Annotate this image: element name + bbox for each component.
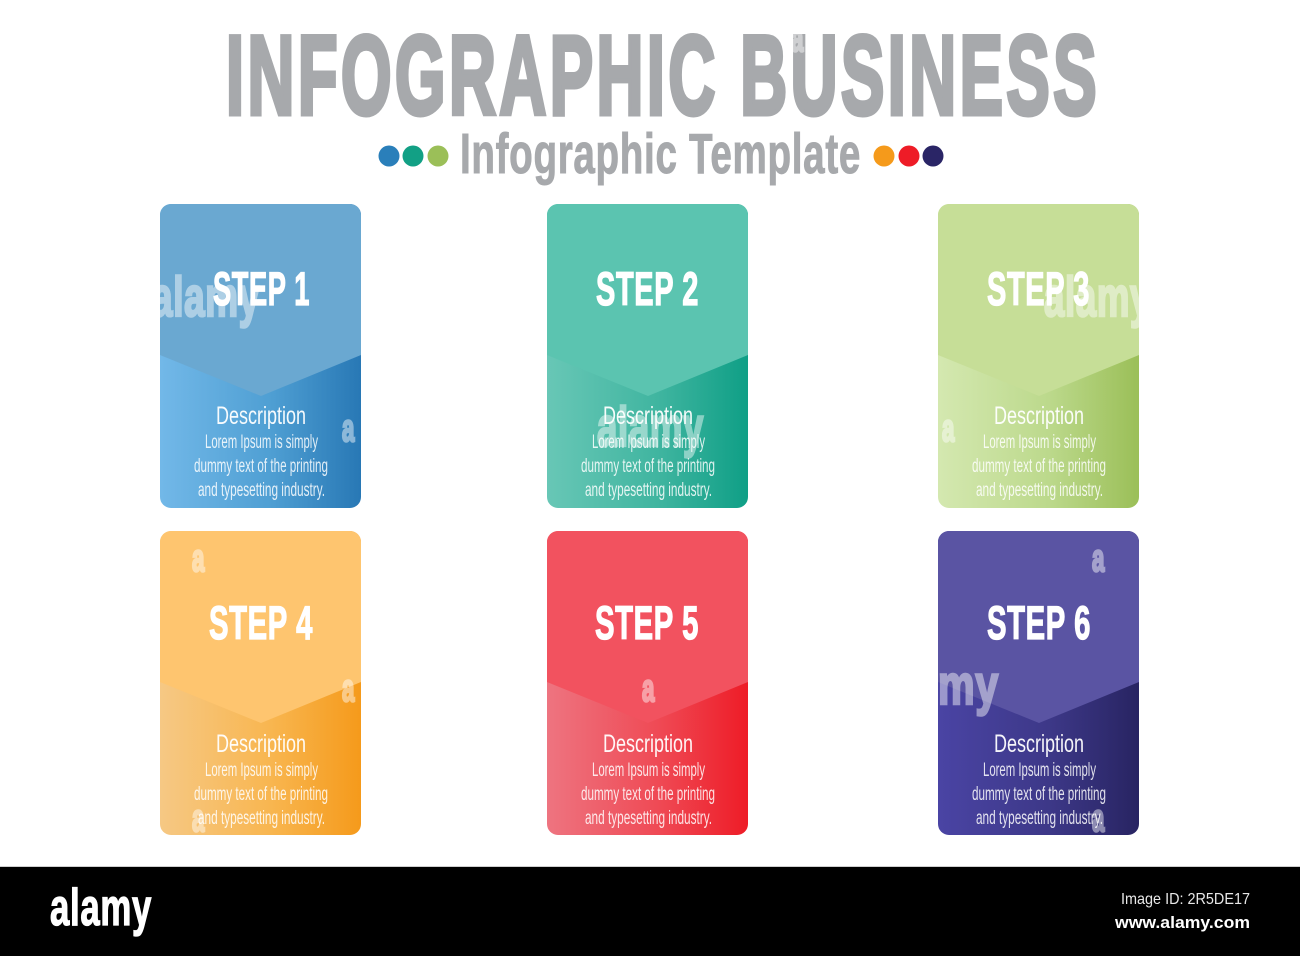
- description text: Lorem Ipsum is simply: [205, 432, 318, 453]
- description text: [972, 432, 1106, 501]
- description text: Lorem Ipsum is simply: [205, 760, 318, 781]
- description text: dummy text of the printing: [581, 784, 715, 805]
- description text: dummy text of the printing: [194, 456, 328, 477]
- footer logo: alamy: [50, 879, 152, 937]
- watermarks: my: [938, 653, 999, 716]
- description text: [972, 760, 1106, 829]
- heading: step 1: STEP 1: [213, 262, 310, 315]
- panel: step 2: [547, 204, 748, 508]
- image id: Image ID: 2R5DE17: [1121, 891, 1250, 908]
- panel: step 6: [938, 531, 1139, 835]
- description text: Lorem Ipsum is simply: [983, 760, 1096, 781]
- heading: step 2: STEP 2: [596, 262, 699, 315]
- description text: and typesetting industry.: [976, 808, 1103, 829]
- description heading: Description: [603, 730, 693, 758]
- watermarks: alamy: [597, 395, 704, 458]
- description heading: Description: [603, 402, 693, 430]
- description text: dummy text of the printing: [972, 784, 1106, 805]
- watermarks: a: [192, 798, 205, 840]
- right color dots: [874, 146, 944, 166]
- watermarks: a: [342, 408, 355, 450]
- description text: Lorem Ipsum is simply: [592, 760, 705, 781]
- heading: step 5: STEP 5: [595, 596, 699, 649]
- heading: step 4: STEP 4: [209, 596, 313, 649]
- heading: step 3: STEP 3: [987, 262, 1090, 315]
- watermarks: a: [942, 408, 955, 450]
- left color dots: [378, 146, 448, 166]
- description text: and typesetting industry.: [585, 808, 712, 829]
- description text: and typesetting industry.: [198, 808, 325, 829]
- watermarks: a: [1092, 538, 1105, 580]
- description text: dummy text of the printing: [581, 456, 715, 477]
- description text: and typesetting industry.: [585, 480, 712, 501]
- footer bar: [0, 866, 1300, 956]
- subtitle: Infographic Template: [460, 122, 861, 186]
- subtitle row: [378, 122, 944, 186]
- description heading: Description: [216, 402, 306, 430]
- watermarks: a: [342, 668, 355, 710]
- panel: step 5: [547, 531, 748, 835]
- description text: and typesetting industry.: [976, 480, 1103, 501]
- watermarks: a: [642, 668, 655, 710]
- watermarks: alamy: [152, 265, 260, 328]
- panel: step 1: [160, 204, 361, 508]
- website: www.alamy.com: [1114, 913, 1250, 932]
- heading: step 6: STEP 6: [987, 596, 1091, 649]
- description text: and typesetting industry.: [198, 480, 325, 501]
- watermarks: alamy: [1044, 265, 1151, 328]
- description heading: Description: [994, 402, 1084, 430]
- description text: [194, 760, 328, 829]
- description text: Lorem Ipsum is simply: [592, 432, 705, 453]
- panel: step 4: [160, 531, 361, 835]
- description text: [581, 432, 715, 501]
- description text: [581, 760, 715, 829]
- watermarks: a: [1092, 798, 1105, 840]
- description text: Lorem Ipsum is simply: [983, 432, 1096, 453]
- description text: dummy text of the printing: [972, 456, 1106, 477]
- description heading: Description: [994, 730, 1084, 758]
- description text: [194, 432, 328, 501]
- description text: dummy text of the printing: [194, 784, 328, 805]
- panel: step 3: [938, 204, 1139, 508]
- watermarks: a: [192, 538, 205, 580]
- watermarks: [152, 18, 1151, 840]
- watermarks: a: [791, 18, 804, 60]
- description heading: Description: [216, 730, 306, 758]
